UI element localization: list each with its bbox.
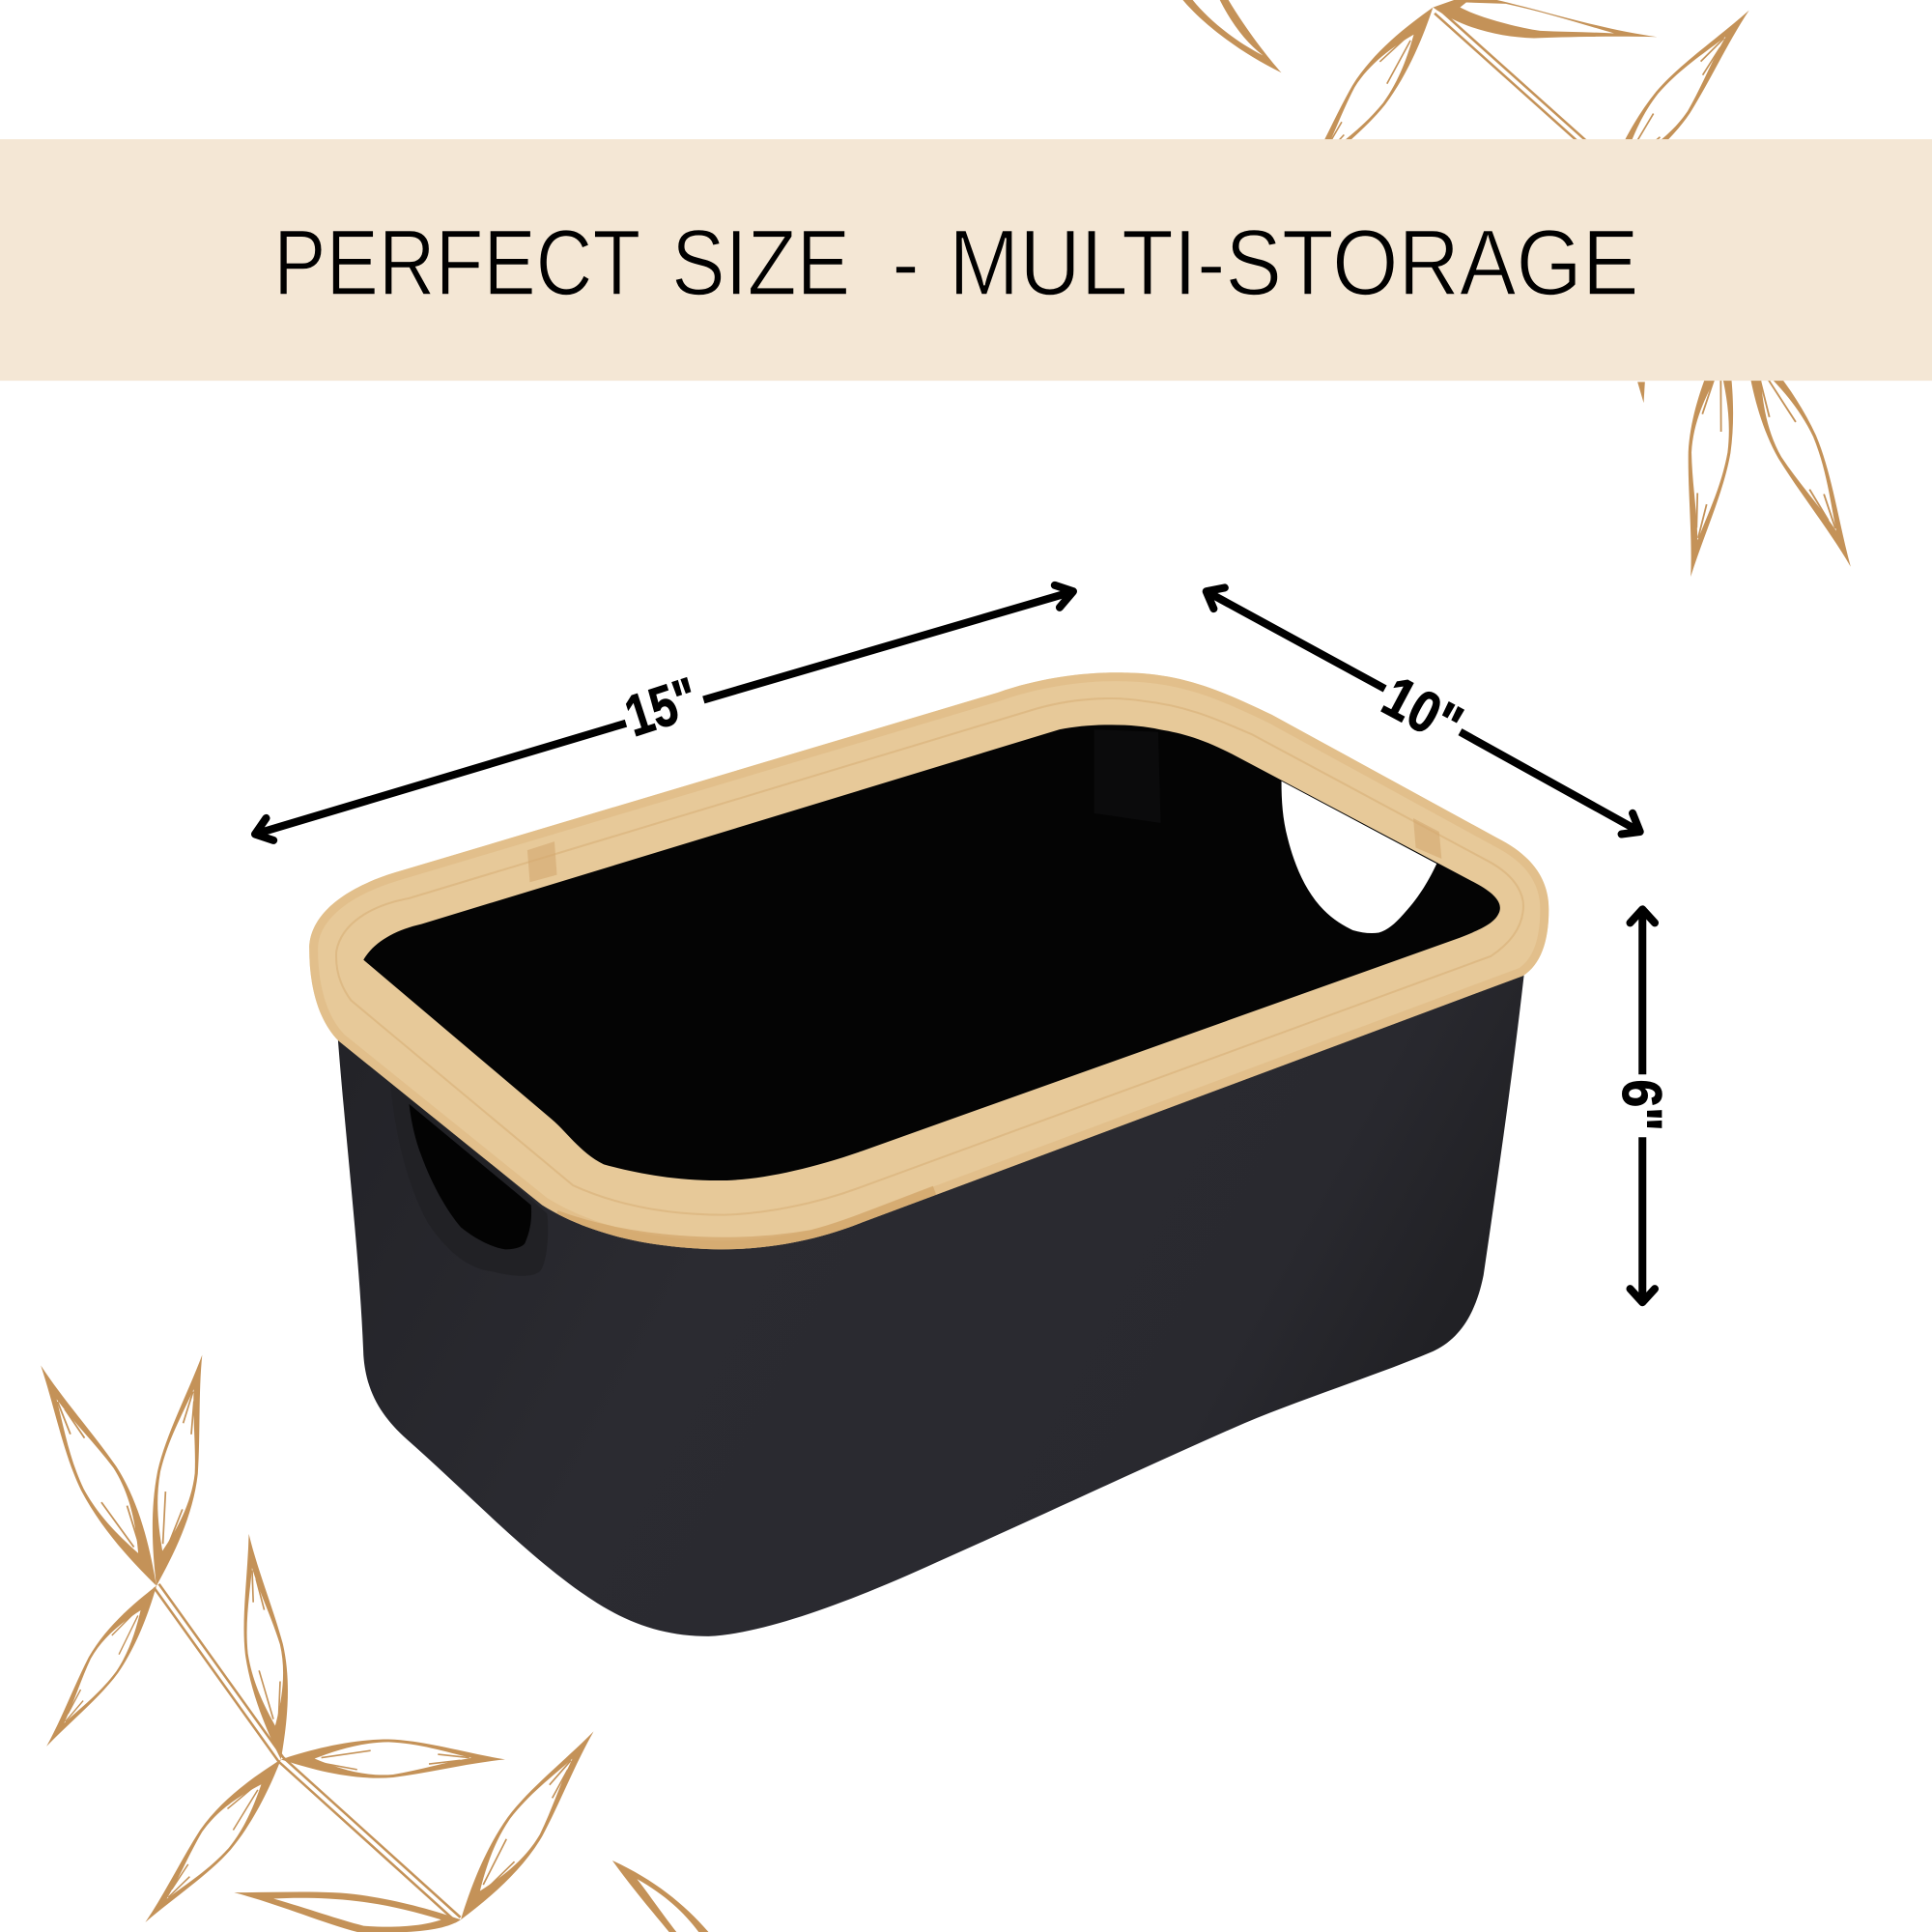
dimension: 10 inch depth arrow [1207,587,1640,835]
interior side panel shade [1094,729,1161,823]
title: PERFECT [273,210,640,315]
rim lower corner shading [554,1195,936,1247]
dimension: 15 inch width arrow [255,585,1073,840]
title: SIZE [671,210,850,315]
label 10 inch: 10" [1373,663,1473,757]
dimension: 6 inch height arrow [1610,909,1672,1302]
basket photo [309,672,1548,1636]
basket bamboo rim [309,672,1548,1249]
rim mid grain line [336,698,1523,1215]
title: - [892,210,920,315]
basket left handle hole [389,1072,548,1276]
decoration: bamboo leaves bottom left [21,1350,708,1932]
title banner [0,139,1932,381]
rim splice marks [527,818,1441,882]
label 6 inch: 6" [1610,1080,1672,1131]
decoration: bamboo leaves top right [1182,0,1872,580]
rim outer grain band [309,672,1548,1249]
title: MULTI-STORAGE [949,210,1638,315]
basket dark interior [363,724,1500,1180]
title [273,210,1638,315]
label 15 inch: 15" [618,666,706,749]
basket fabric body [337,974,1524,1636]
right handle opening [1282,781,1436,933]
